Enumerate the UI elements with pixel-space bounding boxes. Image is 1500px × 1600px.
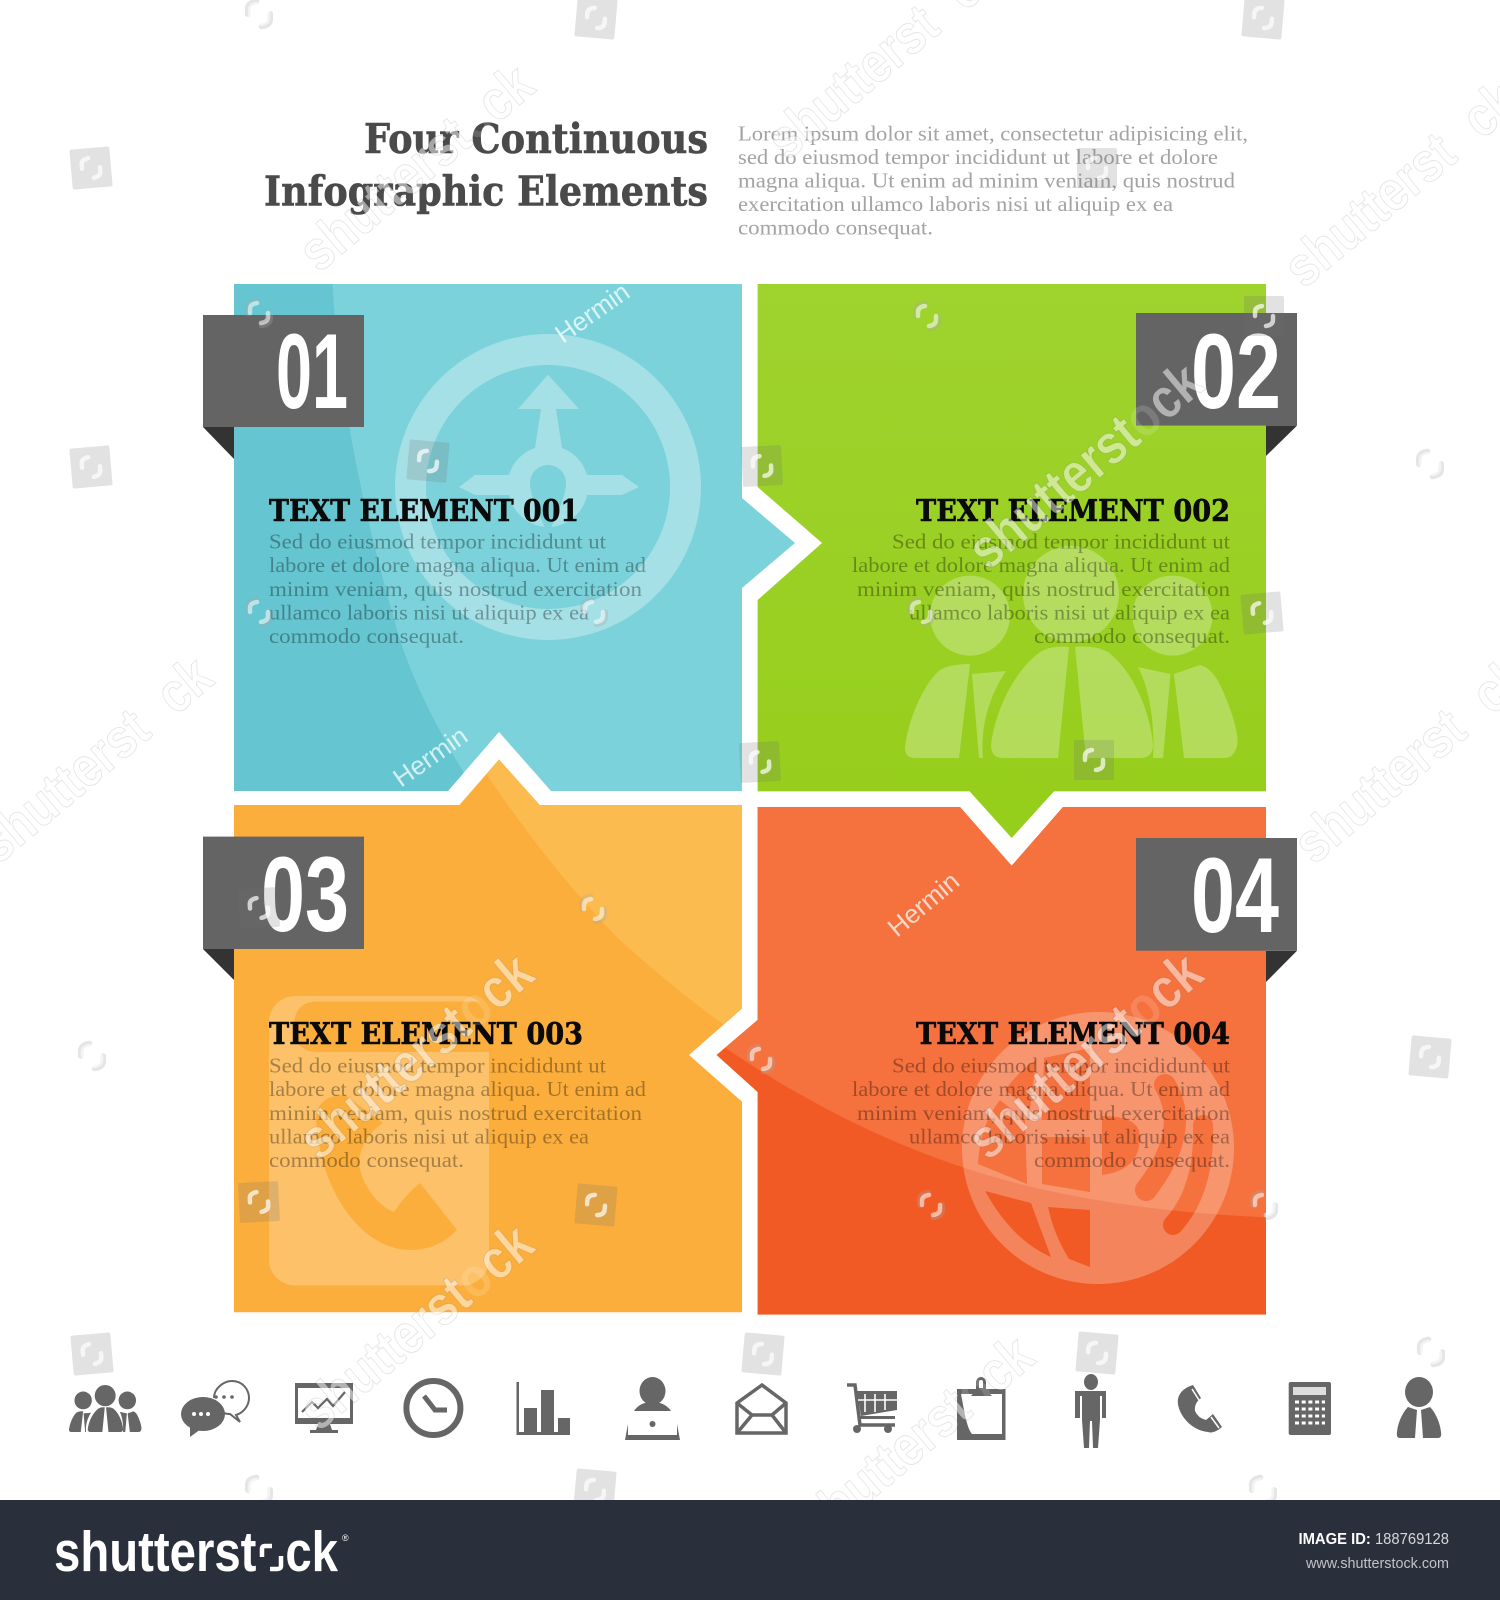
icon: person at laptop [625, 1377, 680, 1440]
body text 003: labore et dolore magna aliqua. Ut enim ad [269, 1077, 647, 1101]
watermark: shutterstock wordmarks: shutterstock [286, 51, 545, 283]
number tag 01: 01 [276, 311, 348, 431]
body text 003: minim veniam, quis nostrud exercitation [269, 1101, 643, 1125]
body text 001: Sed do eiusmod tempor incididunt ut [269, 530, 606, 554]
image id: IMAGE ID: 188769128 [1298, 1531, 1449, 1548]
number tag 04: 04 [1191, 835, 1279, 955]
panel 4: red-orange [700, 800, 1297, 1330]
icon: compass [395, 334, 701, 640]
body text 004 [852, 1054, 1231, 1172]
number tag 03 [203, 834, 364, 980]
icon: team [69, 1385, 141, 1432]
title: Infographic Elements [264, 168, 708, 216]
heading 003: TEXT ELEMENT 003 [269, 1017, 583, 1052]
intro paragraph [738, 122, 1248, 240]
panel 1: teal [203, 270, 820, 810]
icon: clock [406, 1381, 460, 1435]
icon: clipboard [957, 1377, 1006, 1440]
site url: www.shutterstock.com [1305, 1555, 1449, 1572]
number tag 01 [203, 311, 364, 459]
body text 002: commodo consequat. [1034, 624, 1230, 648]
number tag 02: 02 [1191, 311, 1281, 431]
watermark: shutterstock wordmarks: shutterstock [955, 939, 1214, 1171]
body text 001: labore et dolore magna aliqua. Ut enim ad [269, 553, 647, 577]
body text 001 [269, 530, 647, 648]
number tag 04 [1136, 835, 1297, 982]
icon: chat bubbles [181, 1381, 249, 1437]
title: Four Continuous [364, 115, 708, 163]
watermark: shutterstock wordmarks: shutterstock [286, 939, 545, 1171]
footer logo: ® [342, 1533, 349, 1543]
body text 002: ullamco laboris nisi ut aliquip ex ea [909, 600, 1231, 624]
body text 004: labore et dolore magna aliqua. Ut enim ad [852, 1077, 1231, 1101]
icon: standing man [1075, 1374, 1106, 1448]
icon: monitor chart [295, 1383, 353, 1433]
watermark: Hermin credits [387, 276, 965, 943]
body text 003 [269, 1054, 647, 1172]
watermark: Hermin credits: Hermin [549, 276, 635, 349]
body text 001: ullamco laboris nisi ut aliquip ex ea [269, 600, 590, 624]
bottom icon row [69, 1374, 1441, 1448]
body text 002 [852, 530, 1231, 648]
watermark: Hermin credits: Hermin [387, 720, 473, 793]
body text 004: commodo consequat. [1034, 1148, 1230, 1172]
title [264, 115, 708, 216]
footer logo: shutterstock [54, 1520, 338, 1584]
icon: shopping cart [847, 1385, 897, 1433]
heading 004: TEXT ELEMENT 004 [916, 1017, 1230, 1052]
body text 001: minim veniam, quis nostrud exercitation [269, 577, 643, 601]
body text 003: commodo consequat. [269, 1148, 464, 1172]
heading 001: TEXT ELEMENT 001 [269, 494, 579, 529]
intro paragraph: sed do eiusmod tempor incididunt ut labore et dolore [738, 145, 1218, 169]
footer bar [0, 1500, 1500, 1600]
intro paragraph: magna aliqua. Ut enim ad minim veniam, quis nostrud [738, 169, 1236, 193]
body text 001: commodo consequat. [269, 624, 464, 648]
watermark: Hermin credits: Hermin [882, 866, 965, 943]
watermark: shutterstock wordmarks: shutterstock [786, 1322, 1045, 1554]
body text 003: ullamco laboris nisi ut aliquip ex ea [269, 1124, 590, 1148]
icon: calculator [1289, 1382, 1331, 1435]
body text 004: minim veniam, quis nostrud exercitation [857, 1101, 1231, 1125]
icon: bar chart [516, 1382, 570, 1435]
body text 003: Sed do eiusmod tempor incididunt ut [269, 1054, 606, 1078]
number tag 03: 03 [261, 834, 349, 954]
number tag 02 [1136, 311, 1297, 456]
watermark: shutterstock wordmarks: shutterstock [955, 349, 1214, 581]
body text 004: ullamco laboris nisi ut aliquip ex ea [909, 1124, 1231, 1148]
icon: executive [1397, 1377, 1441, 1438]
icon: phone card [269, 996, 489, 1286]
body text 002: minim veniam, quis nostrud exercitation [857, 577, 1231, 601]
watermark: shutterstock wordmarks: shutterstock [286, 1210, 545, 1442]
intro paragraph: commodo consequat. [738, 216, 933, 240]
body text 002: labore et dolore magna aliqua. Ut enim ad [852, 553, 1231, 577]
panel 3: orange [203, 750, 760, 1330]
icon: business people [905, 546, 1238, 758]
panel 2: green [758, 284, 1297, 838]
intro paragraph: exercitation ullamco laboris nisi ut aliquip ex ea [738, 192, 1174, 216]
body text 004: Sed do eiusmod tempor incididunt ut [892, 1054, 1230, 1078]
intro paragraph: Lorem ipsum dolor sit amet, consectetur adipisicing elit, [738, 122, 1248, 146]
icon: open envelope [737, 1385, 786, 1433]
icon: globe with phone [962, 1012, 1234, 1284]
heading 002: TEXT ELEMENT 002 [916, 494, 1230, 529]
icon: telephone handset [1178, 1385, 1222, 1432]
body text 002: Sed do eiusmod tempor incididunt ut [892, 530, 1230, 554]
